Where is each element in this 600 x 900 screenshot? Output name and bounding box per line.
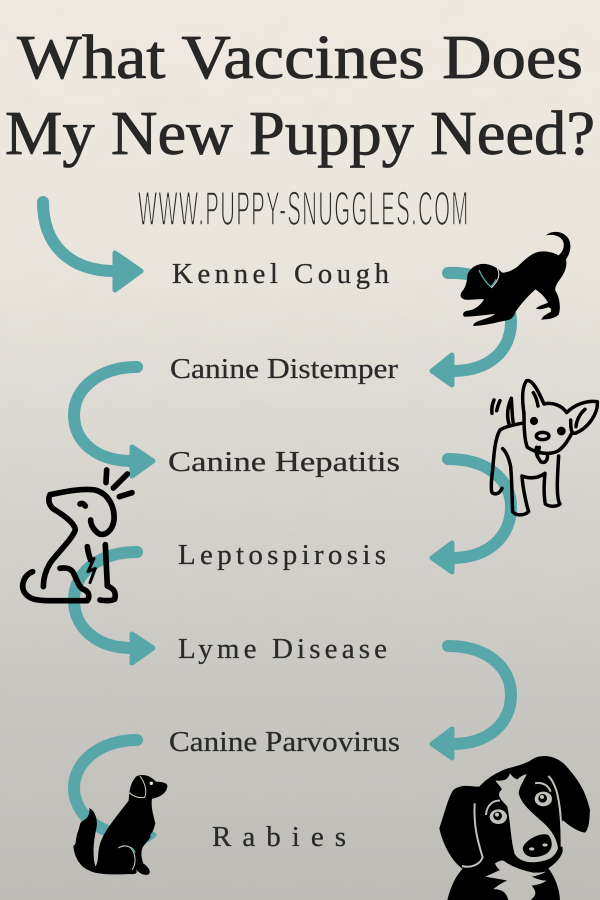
title [5,24,595,168]
label: Canine Parvovirus: Canine Parvovirus [169,726,400,758]
icon: black puppy play bow [461,232,570,326]
label: Rabies: Rabies [212,821,346,853]
arrow: Kennel Cough to Canine Distemper [432,273,511,385]
vaccine list [168,258,400,853]
arrow: Lyme Disease to Canine Parvovirus [432,646,511,758]
label: Leptospirosis: Leptospirosis [178,539,386,571]
arrow: Canine Hepatitis to Leptospirosis [432,459,511,572]
label: Kennel Cough: Kennel Cough [172,258,390,290]
title: My New Puppy Need? [5,100,595,168]
arrow: start to Kennel Cough [43,202,141,290]
arrow: Leptospirosis to Lyme Disease [74,552,153,663]
icon: line-art french bulldog [491,380,597,515]
icon: black sitting golden retriever [73,775,167,875]
label: Lyme Disease: Lyme Disease [178,633,387,665]
icon: line-art sitting dog [23,470,132,601]
arrow: Canine Parvovirus to Rabies [74,740,154,850]
website url: WWW.PUPPY-SNUGGLES.COM [138,182,468,235]
arrow: Canine Distemper to Canine Hepatitis [74,367,153,476]
title: What Vaccines Does [17,24,583,92]
label: Canine Hepatitis: Canine Hepatitis [168,446,400,478]
icon: black and white puppy face [439,756,590,900]
label: Canine Distemper: Canine Distemper [170,353,398,385]
